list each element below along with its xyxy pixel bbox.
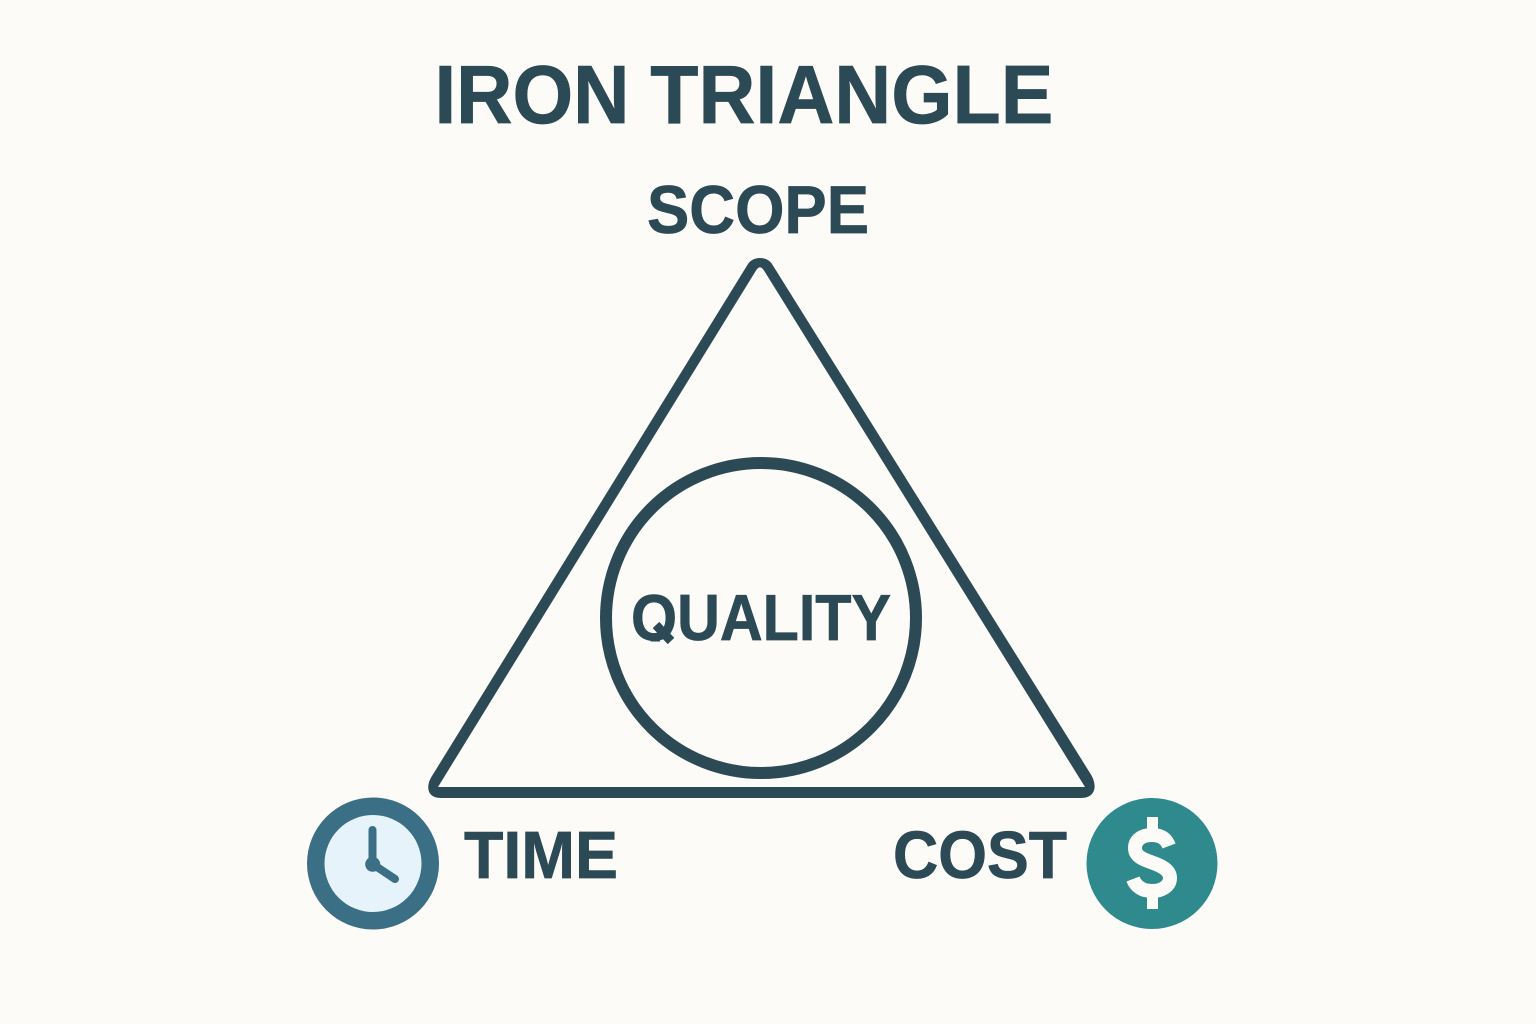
title: TRIANGLE [650, 48, 1053, 141]
circle: quality [606, 463, 916, 773]
label: quality: QUALITY [631, 581, 891, 654]
label: time: TIME [464, 818, 618, 893]
title: IRON [434, 48, 630, 141]
icon: clock [307, 798, 439, 930]
title [434, 48, 1053, 141]
label: quality [633, 594, 891, 644]
label: scope: SCOPE [647, 172, 869, 248]
icon: dollar coin [1086, 798, 1218, 929]
triangle [428, 258, 1095, 798]
label: cost: COST [893, 818, 1067, 893]
